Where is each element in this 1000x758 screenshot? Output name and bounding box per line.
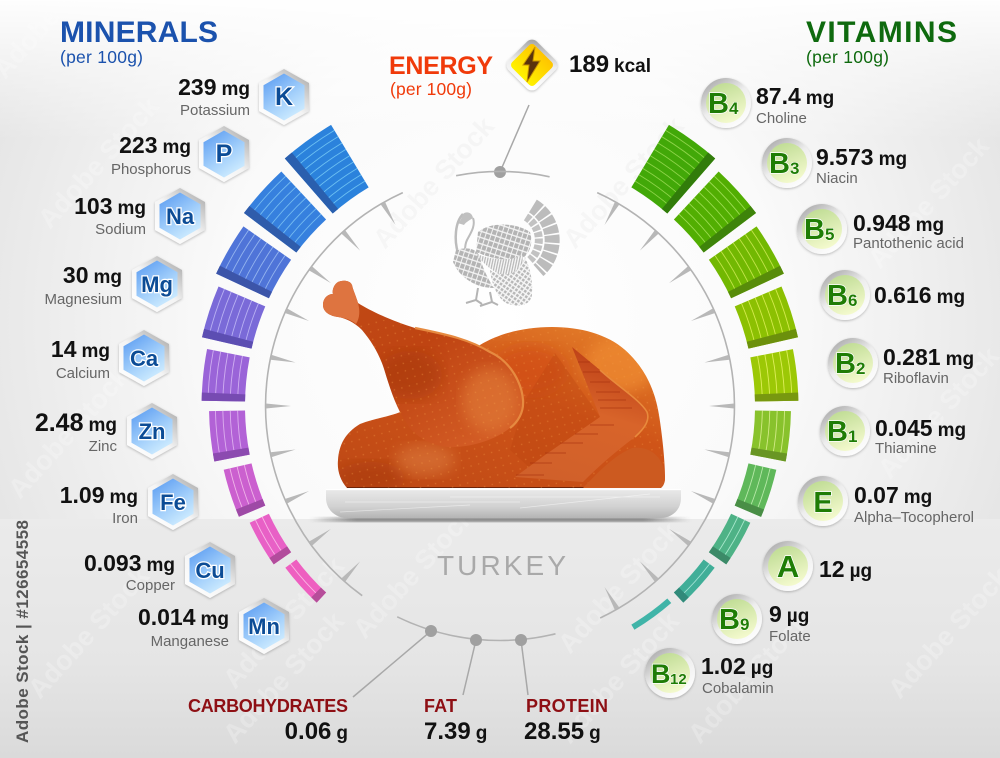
heading: energy [389,52,493,99]
badge: B2: 2 [856,359,865,378]
value: niacin: 9.573 mg [816,144,907,170]
value: thiamine [875,415,966,457]
badge: Cu [185,542,235,598]
heading: minerals [60,16,218,67]
badge: B5 [797,204,847,254]
value: cobalamin: 1.02 µg [701,653,773,679]
bar: magnesium [202,285,267,350]
plate [326,489,681,518]
value: sodium: Sodium [95,221,146,238]
value: energy: 189 kcal [569,51,651,78]
heading: minerals: MINERALS [60,16,218,49]
body [338,327,665,488]
heading: vitamins [806,16,957,67]
value: B6: 0.616 mg [874,282,965,308]
background: Adobe Stock [217,606,351,749]
value: calcium: Calcium [56,365,110,382]
value: manganese: 0.014 mg [138,604,229,630]
value: manganese [138,604,229,650]
badge: B3: B [769,148,790,180]
value: protein [524,696,608,745]
value: riboflavin: 0.281 mg [883,344,974,370]
pointer: energy [494,105,529,178]
bar: potassium [285,121,378,216]
value: copper: Copper [126,577,175,594]
badge: Na: Na [166,204,195,229]
bar: B6 [731,287,802,357]
chart: vitamin bars [629,125,803,633]
badge: Mg [132,256,182,312]
badge: A [763,541,813,591]
value: carbohydrates: 0.06 g [285,718,348,745]
value: folate: 9 µg [769,601,809,627]
background: Adobe Stock [32,91,166,234]
bar: E [734,462,776,518]
badge: B6 [820,270,870,320]
badge: Mn [239,598,289,654]
badge: Mn: Mn [248,614,280,639]
value: choline [756,83,834,127]
value: cobalamin [701,653,774,697]
badge: B9 [712,594,762,644]
badge: B12 [645,648,695,698]
badge: B2 [828,338,878,388]
value: thiamine: Thiamine [875,440,937,457]
chart: mineral bars [202,121,378,603]
value: iron: 1.09 mg [60,482,138,508]
lower right lobe [583,448,665,488]
badge: B2: B [835,348,856,380]
value: riboflavin [883,344,974,387]
background: Adobe Stock [552,516,686,659]
value: magnesium: Magnesium [44,291,122,308]
illustration: roast turkey on plate [310,281,690,522]
heading: vitamins: VITAMINS [806,16,957,49]
bar: B4 [629,125,718,220]
wing [515,347,648,482]
plate highlight [326,488,681,490]
badge: B3 [762,138,812,188]
value: magnesium: 30 mg [63,262,122,288]
bar: A [707,512,750,566]
plate shadow [310,517,690,522]
value: pantothenic acid [853,210,964,252]
value: fat [424,696,487,745]
value: alpha-tocopherol: 0.07 mg [854,482,932,508]
heading: energy: ENERGY [389,52,493,80]
value: sodium: 103 mg [74,193,146,219]
badge: B6: 6 [848,291,857,310]
value: calcium [51,336,110,382]
badge: Zn [127,403,177,459]
value: phosphorus [111,132,191,178]
bar: B9 [672,557,715,605]
value: potassium [178,74,250,119]
value: potassium: Potassium [180,102,250,119]
value: cobalamin: Cobalamin [702,680,774,697]
value: iron: Iron [112,510,138,527]
badge: E: E [813,487,833,519]
badge: P [199,126,249,182]
value: manganese: Manganese [151,633,229,650]
bar: sodium [216,224,295,300]
value: alpha-tocopherol: Alpha–Tocopherol [854,509,974,526]
badge: E [798,476,848,526]
bar: zinc [205,404,253,462]
value: choline: 87.4 mg [756,83,834,109]
value: zinc: 2.48 mg [35,409,117,437]
background: Adobe Stock [557,111,691,254]
badge: Ca [119,330,169,386]
badge: B1 [820,406,870,456]
value: zinc: Zinc [89,438,117,455]
badge: B6: B [827,280,848,312]
badge: Fe: Fe [160,490,186,515]
badge: K [259,69,309,125]
badge: K: K [275,83,293,111]
value: calcium: 14 mg [51,336,110,362]
value: pantothenic acid: 0.948 mg [853,210,944,236]
background: Adobe Stock [862,131,996,274]
icon: turkey silhouette [453,206,552,306]
background: Adobe Stock [552,606,686,749]
background: Adobe Stock [367,111,501,254]
badge: B5: B [804,214,825,246]
background: Adobe Stock [347,501,481,644]
drumstick [323,281,530,450]
badge: B1: 1 [848,427,857,446]
badge: B12: 12 [670,671,687,688]
heading: vitamins: (per 100g) [806,47,889,67]
badge: Ca: Ca [130,346,159,371]
bar: copper [246,511,294,564]
badge: B9: B [719,604,740,636]
bar: iron [220,459,269,517]
bar: manganese [283,558,329,603]
background: Adobe Stock [217,551,351,694]
badge: B4 [701,78,751,128]
bar: B1 [750,410,791,462]
bar: B5 [706,226,788,307]
value: iron [60,482,138,527]
value: copper [84,550,175,594]
bar: B12 [631,596,671,633]
background: Adobe Stock [22,561,156,704]
value: sodium [74,193,146,238]
value: phosphorus: 223 mg [119,132,191,158]
bar: B2 [747,349,803,409]
value: folate [769,601,811,645]
badge: Zn: Zn [139,419,165,444]
badge: B9: 9 [740,615,749,634]
value: pantothenic acid: Pantothenic acid [853,235,964,252]
value: magnesium [44,262,122,308]
value: thiamine: 0.045 mg [875,415,966,441]
badge: Cu: Cu [195,558,225,583]
badge: Na [155,188,205,244]
icon: energy diamond [504,37,560,93]
value: choline: Choline [756,110,807,127]
bar: B3 [671,172,759,260]
value: alpha-tocopherol [854,482,974,526]
pointers: macronutrients [353,625,528,697]
badge: B5: 5 [825,225,834,244]
badge: B1: B [827,416,848,448]
bar: phosphorus [244,169,333,255]
value: folate: Folate [769,628,811,645]
value: fat: 7.39 g [424,718,487,745]
heading: minerals: (per 100g) [60,47,143,67]
heading: energy: (per 100g) [390,79,472,99]
value: niacin: Niacin [816,170,858,187]
bar: calcium [202,349,250,402]
value: niacin [816,144,907,187]
label: turkey: TURKEY [437,550,566,581]
value: A: 12 µg [819,556,872,582]
value: protein: PROTEIN [526,696,608,716]
credit: stock id: Adobe Stock | #126654558 [13,520,32,743]
badge: Mg: Mg [141,272,173,297]
badge: Fe [148,474,198,530]
value: riboflavin: Riboflavin [883,370,949,387]
value: phosphorus: Phosphorus [111,161,191,178]
value: potassium: 239 mg [178,74,250,100]
value: fat: FAT [424,696,457,716]
badge: B12: B [651,659,670,689]
value: carbohydrates: CARBOHYDRATES [188,696,348,716]
badge: A: A [777,549,799,584]
dial arcs and ticks [266,172,734,640]
badge: B4: 4 [729,99,739,118]
badge: B3: 3 [790,159,799,178]
background: Adobe Stock [2,361,136,504]
value: carbohydrates [188,696,348,745]
badge: P: P [216,140,232,168]
badge: B4: B [708,88,729,120]
background: Adobe Stock [682,606,816,749]
value: zinc [35,409,117,455]
value: protein: 28.55 g [524,718,601,745]
value: copper: 0.093 mg [84,550,175,576]
